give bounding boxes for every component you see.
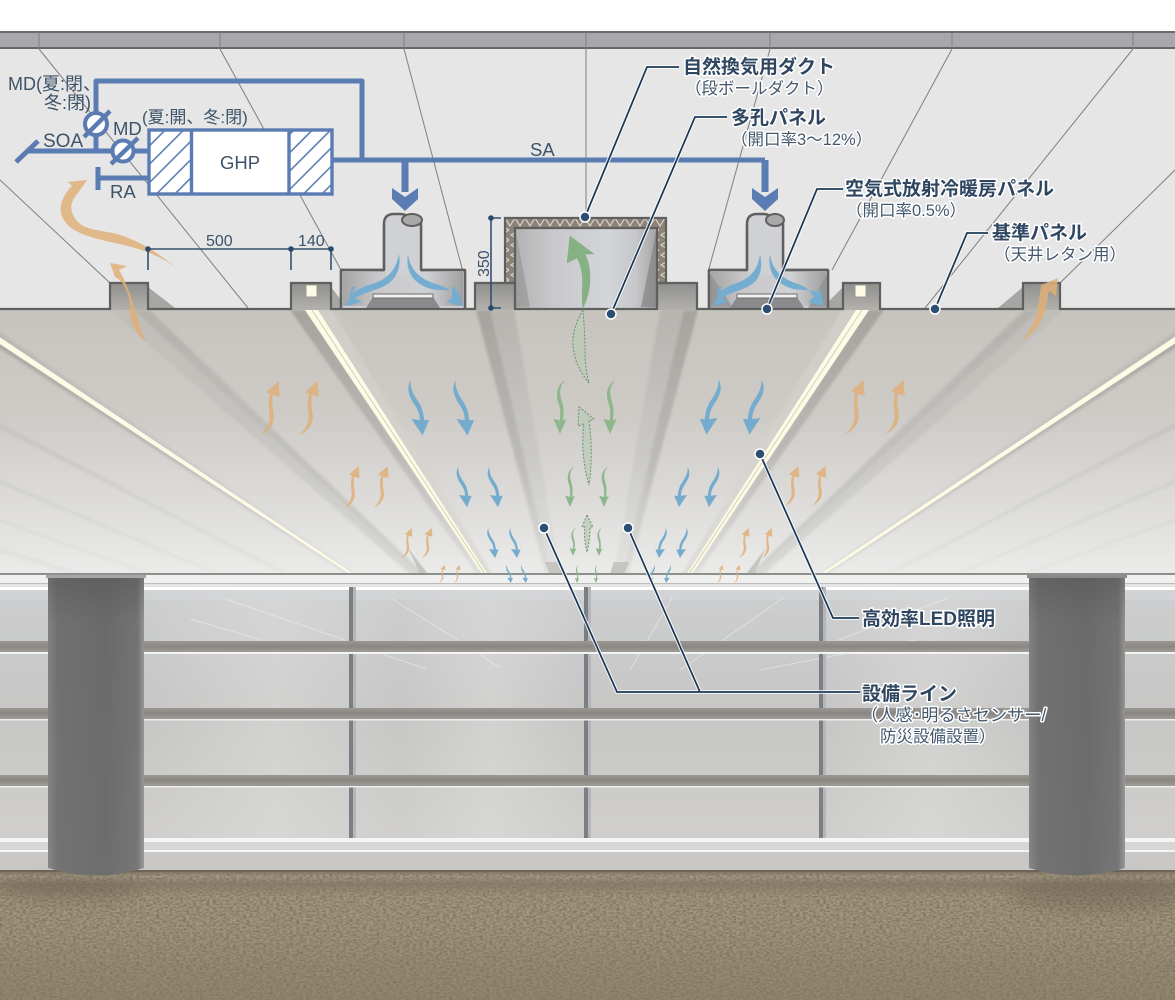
system labels: RA <box>110 181 136 202</box>
system labels: MD(夏:閉、 <box>8 74 101 94</box>
label: radiant panel: （開口率0.5%） <box>846 201 966 220</box>
dimension 500 / 140: 140 <box>298 233 325 250</box>
ceiling section profile <box>110 283 1060 310</box>
leader: LED lighting <box>755 449 859 618</box>
carpet floor <box>0 870 1175 1000</box>
far-end rib stubs <box>408 548 766 574</box>
leader: radiant panel <box>762 189 843 314</box>
rib soft centre shading <box>162 340 1010 573</box>
LED strips <box>0 310 1175 573</box>
dimension 500 / 140: 500 <box>206 233 233 250</box>
airflow: diffuser right <box>713 254 824 306</box>
horizontal rails <box>0 641 1175 788</box>
system labels: (夏:開、冬:閉) <box>142 108 248 127</box>
supply diffuser left <box>341 214 465 308</box>
orange return air arrows <box>61 180 1058 583</box>
label: perforated panel: 多孔パネル <box>731 107 826 129</box>
system labels: SOA <box>43 131 83 152</box>
leader: equipment line <box>539 523 860 692</box>
ceiling panels in perspective <box>0 310 1175 573</box>
leader: perforated panel <box>606 117 727 319</box>
supply arrow heads <box>392 188 778 211</box>
label: equipment line: 設備ライン <box>862 683 957 705</box>
damper upper <box>84 111 110 137</box>
leader: natural ventilation duct <box>580 67 679 222</box>
GHP unit <box>149 130 332 194</box>
label: equipment line: （人感･明るさセンサー/ <box>861 705 1046 725</box>
ductwork <box>16 81 765 192</box>
supply diffuser right <box>709 214 828 308</box>
label: LED lighting: 高効率LED照明 <box>862 608 995 630</box>
dimension 350 <box>476 215 501 311</box>
system labels: SA <box>530 139 555 160</box>
GHP unit: GHP <box>220 152 260 173</box>
label: equipment line: 防災設備設置） <box>880 727 996 746</box>
airflow: diffuser left <box>345 254 462 306</box>
central rib bands <box>490 310 556 562</box>
label: equipment line <box>861 683 1046 746</box>
left column <box>46 575 146 876</box>
right column <box>1027 575 1127 876</box>
GHP system diagram <box>8 74 778 211</box>
dotted exhaust arrows <box>573 310 594 552</box>
LED flanks <box>290 310 481 573</box>
label: perforated panel: （開口率3〜12%） <box>731 130 872 149</box>
label: standard panel <box>992 222 1126 264</box>
label: standard panel: 基準パネル <box>992 222 1087 244</box>
large green exhaust arrow <box>567 236 594 308</box>
dimension 350: 350 <box>476 250 493 277</box>
blue cool air arrows <box>408 380 764 583</box>
leader: standard panel <box>930 233 988 314</box>
ceiling plenum section <box>0 31 1175 310</box>
green intake arrows <box>554 380 616 583</box>
label: natural ventilation duct: 自然換気用ダクト <box>683 55 835 78</box>
label: natural ventilation duct <box>683 55 835 98</box>
label: radiant panel <box>845 178 1054 220</box>
wall with glazing <box>0 573 1175 871</box>
label: radiant panel: 空気式放射冷暖房パネル <box>845 178 1054 200</box>
window mullions <box>349 587 826 841</box>
left rib shadows <box>0 310 1175 551</box>
system labels: 冬:閉) <box>44 93 91 113</box>
label: perforated panel <box>731 107 872 149</box>
system labels <box>8 74 555 202</box>
dimension 500 / 140 <box>145 233 334 270</box>
label: natural ventilation duct: （段ボールダクト） <box>685 79 834 98</box>
natural ventilation cardboard duct <box>0 217 1175 309</box>
label: standard panel: （天井レタン用） <box>994 245 1126 264</box>
damper lower <box>111 138 138 164</box>
system labels: MD <box>113 118 142 139</box>
glass reflections <box>190 598 948 670</box>
